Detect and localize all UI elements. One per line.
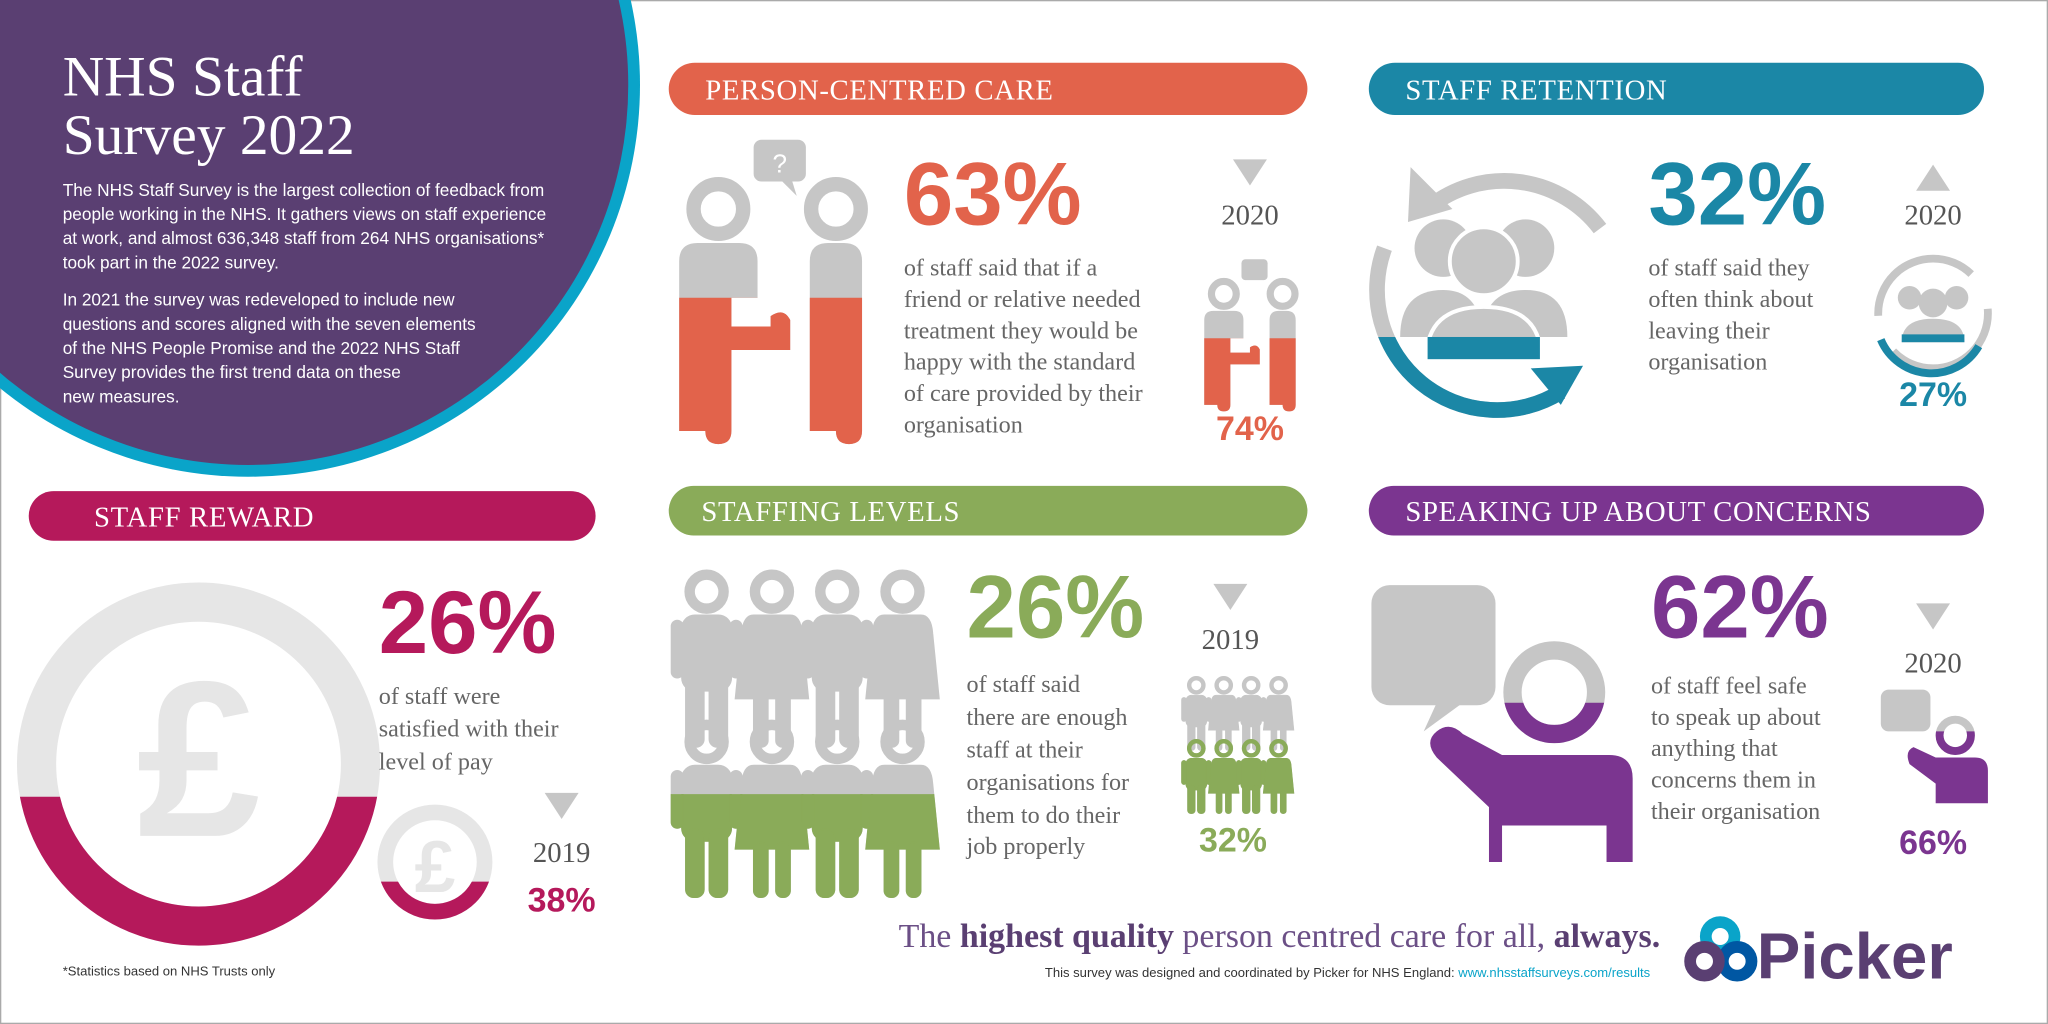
panel: staff retention: of staff said they bbox=[1648, 255, 1810, 282]
panel: staffing levels bbox=[669, 486, 1307, 897]
panel: person-centred care: PERSON-CENTRED CARE bbox=[705, 74, 1054, 106]
trend 2020 bbox=[1881, 603, 1988, 862]
panel: staffing levels: organisations for bbox=[967, 769, 1129, 796]
trend 2019: £ bbox=[415, 827, 455, 908]
trend 2019 bbox=[385, 793, 596, 920]
trend 2020: 27% bbox=[1899, 376, 1967, 414]
panel: speaking up: of staff feel safe bbox=[1651, 673, 1807, 700]
panel: staffing levels: STAFFING LEVELS bbox=[701, 496, 960, 528]
icon: pound coin: £ bbox=[137, 636, 260, 884]
panel: staff retention: leaving their bbox=[1648, 317, 1770, 344]
trend 2019: 2019 bbox=[533, 837, 590, 869]
trend 2019: 32% bbox=[1199, 822, 1267, 860]
intro text: of the NHS People Promise and the 2022 NHS Staff bbox=[63, 338, 460, 358]
panel: staff reward: of staff were bbox=[379, 683, 500, 710]
trend 2020: 2020 bbox=[1904, 200, 1962, 232]
panel: speaking up: anything that bbox=[1651, 735, 1778, 762]
panel: person-centred care bbox=[669, 63, 1307, 448]
panel: staffing levels: of staff said bbox=[967, 671, 1080, 698]
panel: speaking up: to speak up about bbox=[1651, 704, 1821, 731]
panel: staffing levels: there are enough bbox=[967, 704, 1127, 731]
panel: staff reward: satisfied with their bbox=[379, 716, 559, 743]
panel: speaking up: their organisation bbox=[1651, 798, 1820, 825]
panel: staffing levels: job properly bbox=[966, 833, 1085, 860]
panel: intro circle: Survey 2022 bbox=[63, 104, 355, 167]
trend 2019: 38% bbox=[528, 882, 596, 920]
icon: pound coin bbox=[37, 602, 360, 926]
panel: speaking up: 62% bbox=[1651, 557, 1829, 656]
intro text: The NHS Staff Survey is the largest collection of feedback from bbox=[63, 180, 544, 200]
footer tagline: The highest quality person centred care for all, always. bbox=[899, 918, 1660, 955]
panel: staff retention: organisation bbox=[1648, 349, 1767, 376]
panel: person-centred care: treatment they would be bbox=[904, 317, 1138, 344]
footer credit: This survey was designed and coordinated by Picker for NHS England: www.nhsstaffsurveys.com/results bbox=[1045, 965, 1651, 980]
intro text: Survey provides the first trend data on these bbox=[63, 362, 401, 382]
title: NHS Staff bbox=[63, 45, 304, 108]
trend 2020: 66% bbox=[1899, 824, 1967, 862]
heading pill bbox=[669, 63, 1307, 115]
panel: intro circle bbox=[0, 0, 640, 477]
intro text: new measures. bbox=[63, 386, 180, 406]
icon: two people with question: ? bbox=[772, 148, 787, 178]
intro text: In 2021 the survey was redeveloped to include new bbox=[63, 290, 455, 310]
panel: staff retention: 32% bbox=[1648, 145, 1826, 244]
trend 2019 bbox=[1181, 584, 1294, 860]
panel: speaking up: concerns them in bbox=[1651, 767, 1816, 794]
icon: person with speech bubble bbox=[1371, 585, 1633, 862]
panel: staff retention: STAFF RETENTION bbox=[1405, 74, 1667, 106]
trend 2020 bbox=[1204, 159, 1296, 448]
intro text: people working in the NHS. It gathers views on staff experience bbox=[63, 204, 546, 224]
logo: Picker: Picker bbox=[1757, 919, 1953, 992]
panel: person-centred care: of care provided by their bbox=[904, 380, 1143, 407]
intro text: at work, and almost 636,348 staff from 264 NHS organisations* bbox=[63, 228, 545, 248]
panel: staff retention bbox=[1369, 63, 1988, 414]
trend 2020: 2020 bbox=[1221, 200, 1279, 232]
panel: staff retention: often think about bbox=[1648, 286, 1814, 313]
panel: person-centred care: friend or relative needed bbox=[904, 286, 1141, 313]
icon: circular arrows with group bbox=[1377, 167, 1600, 410]
panel: staff reward: 26% bbox=[379, 573, 557, 672]
panel: staff reward: level of pay bbox=[379, 748, 493, 775]
panel: staffing levels: them to do their bbox=[967, 802, 1120, 829]
panel: person-centred care: organisation bbox=[904, 411, 1023, 438]
panel: staffing levels: 26% bbox=[967, 557, 1144, 656]
panel: person-centred care: happy with the standard bbox=[904, 349, 1135, 376]
stat: 63% bbox=[904, 145, 1082, 244]
panel: person-centred care: of staff said that if a bbox=[904, 255, 1098, 282]
icon: two people with question bbox=[679, 140, 862, 444]
intro text: questions and scores aligned with the seven elements bbox=[63, 314, 476, 334]
trend 2019: 2019 bbox=[1202, 624, 1259, 656]
trend 2020: 2020 bbox=[1904, 648, 1962, 680]
panel: speaking up bbox=[1369, 486, 1988, 862]
panel: staffing levels: staff at their bbox=[967, 737, 1083, 764]
trend 2020 bbox=[1878, 165, 1988, 414]
icon: people grid bbox=[671, 575, 939, 897]
trend 2020: 74% bbox=[1216, 410, 1284, 448]
panel: staff reward: STAFF REWARD bbox=[94, 501, 314, 533]
footnote: *Statistics based on NHS Trusts only bbox=[63, 964, 276, 979]
panel: speaking up: SPEAKING UP ABOUT CONCERNS bbox=[1405, 496, 1872, 528]
panel: staff reward bbox=[29, 491, 596, 926]
intro text: took part in the 2022 survey. bbox=[63, 252, 279, 272]
